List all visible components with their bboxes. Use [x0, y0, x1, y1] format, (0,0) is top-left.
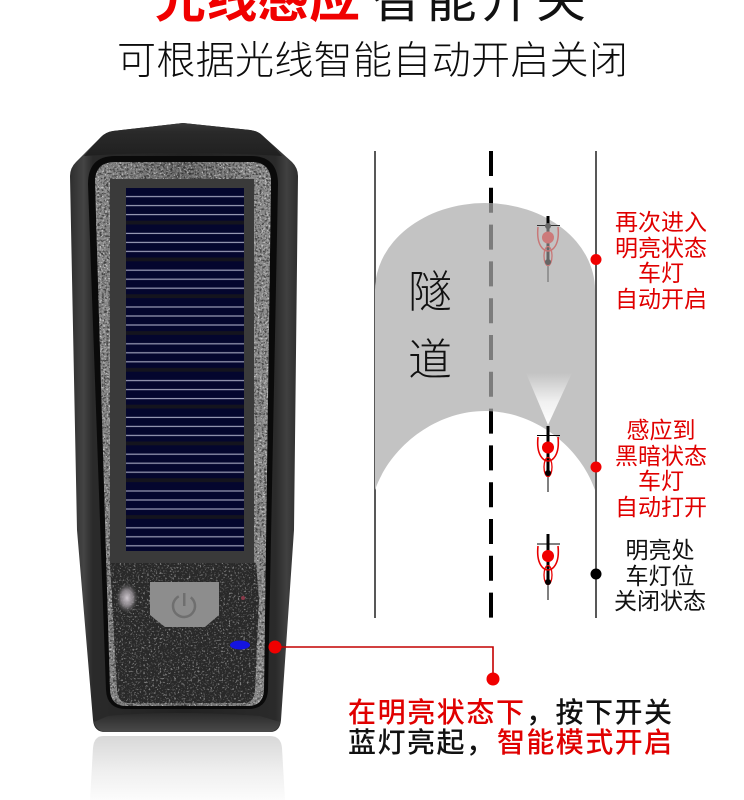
title: [155, 0, 586, 28]
device reflection: [90, 736, 285, 800]
callout text: 智能模式开启: [497, 727, 672, 758]
road edges: [375, 151, 596, 618]
label: darkness sensed: 黑暗状态: [615, 443, 707, 469]
light sensor glow: [116, 583, 138, 613]
callout text: 蓝灯亮起，: [348, 727, 494, 758]
tunnel label: 隧: [408, 268, 452, 317]
marker: darkness sensed: [590, 462, 602, 472]
solar panel: [110, 179, 254, 563]
label: darkness sensed: 车灯: [638, 468, 684, 494]
red indicator: [241, 596, 245, 600]
label: lights off when bright: 关闭状态: [614, 588, 706, 614]
cyclist in daylight: [537, 534, 560, 600]
marker: light off: [590, 568, 602, 580]
callout text: 在明亮状态下: [348, 697, 524, 728]
cyclist exiting tunnel: [537, 216, 560, 282]
tunnel label: 道: [408, 336, 452, 385]
lower control panel: [110, 563, 259, 703]
device body: [70, 123, 298, 732]
product: solar bike light: [70, 123, 298, 800]
frosted ring: [88, 155, 280, 715]
label: lights off when bright: 明亮处: [626, 537, 694, 563]
label: darkness sensed: [615, 417, 707, 520]
label: re-entering bright state: 明亮状态: [615, 235, 707, 261]
subtitle: 可根据光线智能自动开启关闭: [117, 40, 628, 83]
tunnel: [375, 203, 595, 490]
label: lights off when bright: [614, 537, 706, 614]
cyclist entering tunnel: [537, 426, 560, 492]
callout text: ，按下开关: [526, 697, 672, 728]
label: re-entering bright state: [615, 209, 707, 312]
power button: [150, 582, 219, 627]
label: darkness sensed: 感应到: [626, 417, 696, 443]
center dashed line: [489, 151, 493, 618]
label: re-entering bright state: 再次进入: [615, 209, 707, 235]
callout connector: [268, 640, 500, 686]
callout text: [348, 697, 672, 758]
road diagram: [375, 151, 602, 618]
blue indicator LED: [230, 640, 250, 650]
tunnel label: [408, 268, 452, 385]
label: re-entering bright state: 自动开启: [615, 286, 707, 312]
center line in tunnel: [489, 203, 493, 412]
headlight beam: [526, 373, 572, 425]
label: darkness sensed: 自动打开: [615, 494, 707, 520]
chin of shell: [94, 713, 280, 732]
label: re-entering bright state: 车灯: [638, 260, 684, 286]
top shell: [84, 123, 282, 156]
label: lights off when bright: 车灯位: [626, 563, 694, 589]
marker: re-entering light: [590, 254, 602, 265]
